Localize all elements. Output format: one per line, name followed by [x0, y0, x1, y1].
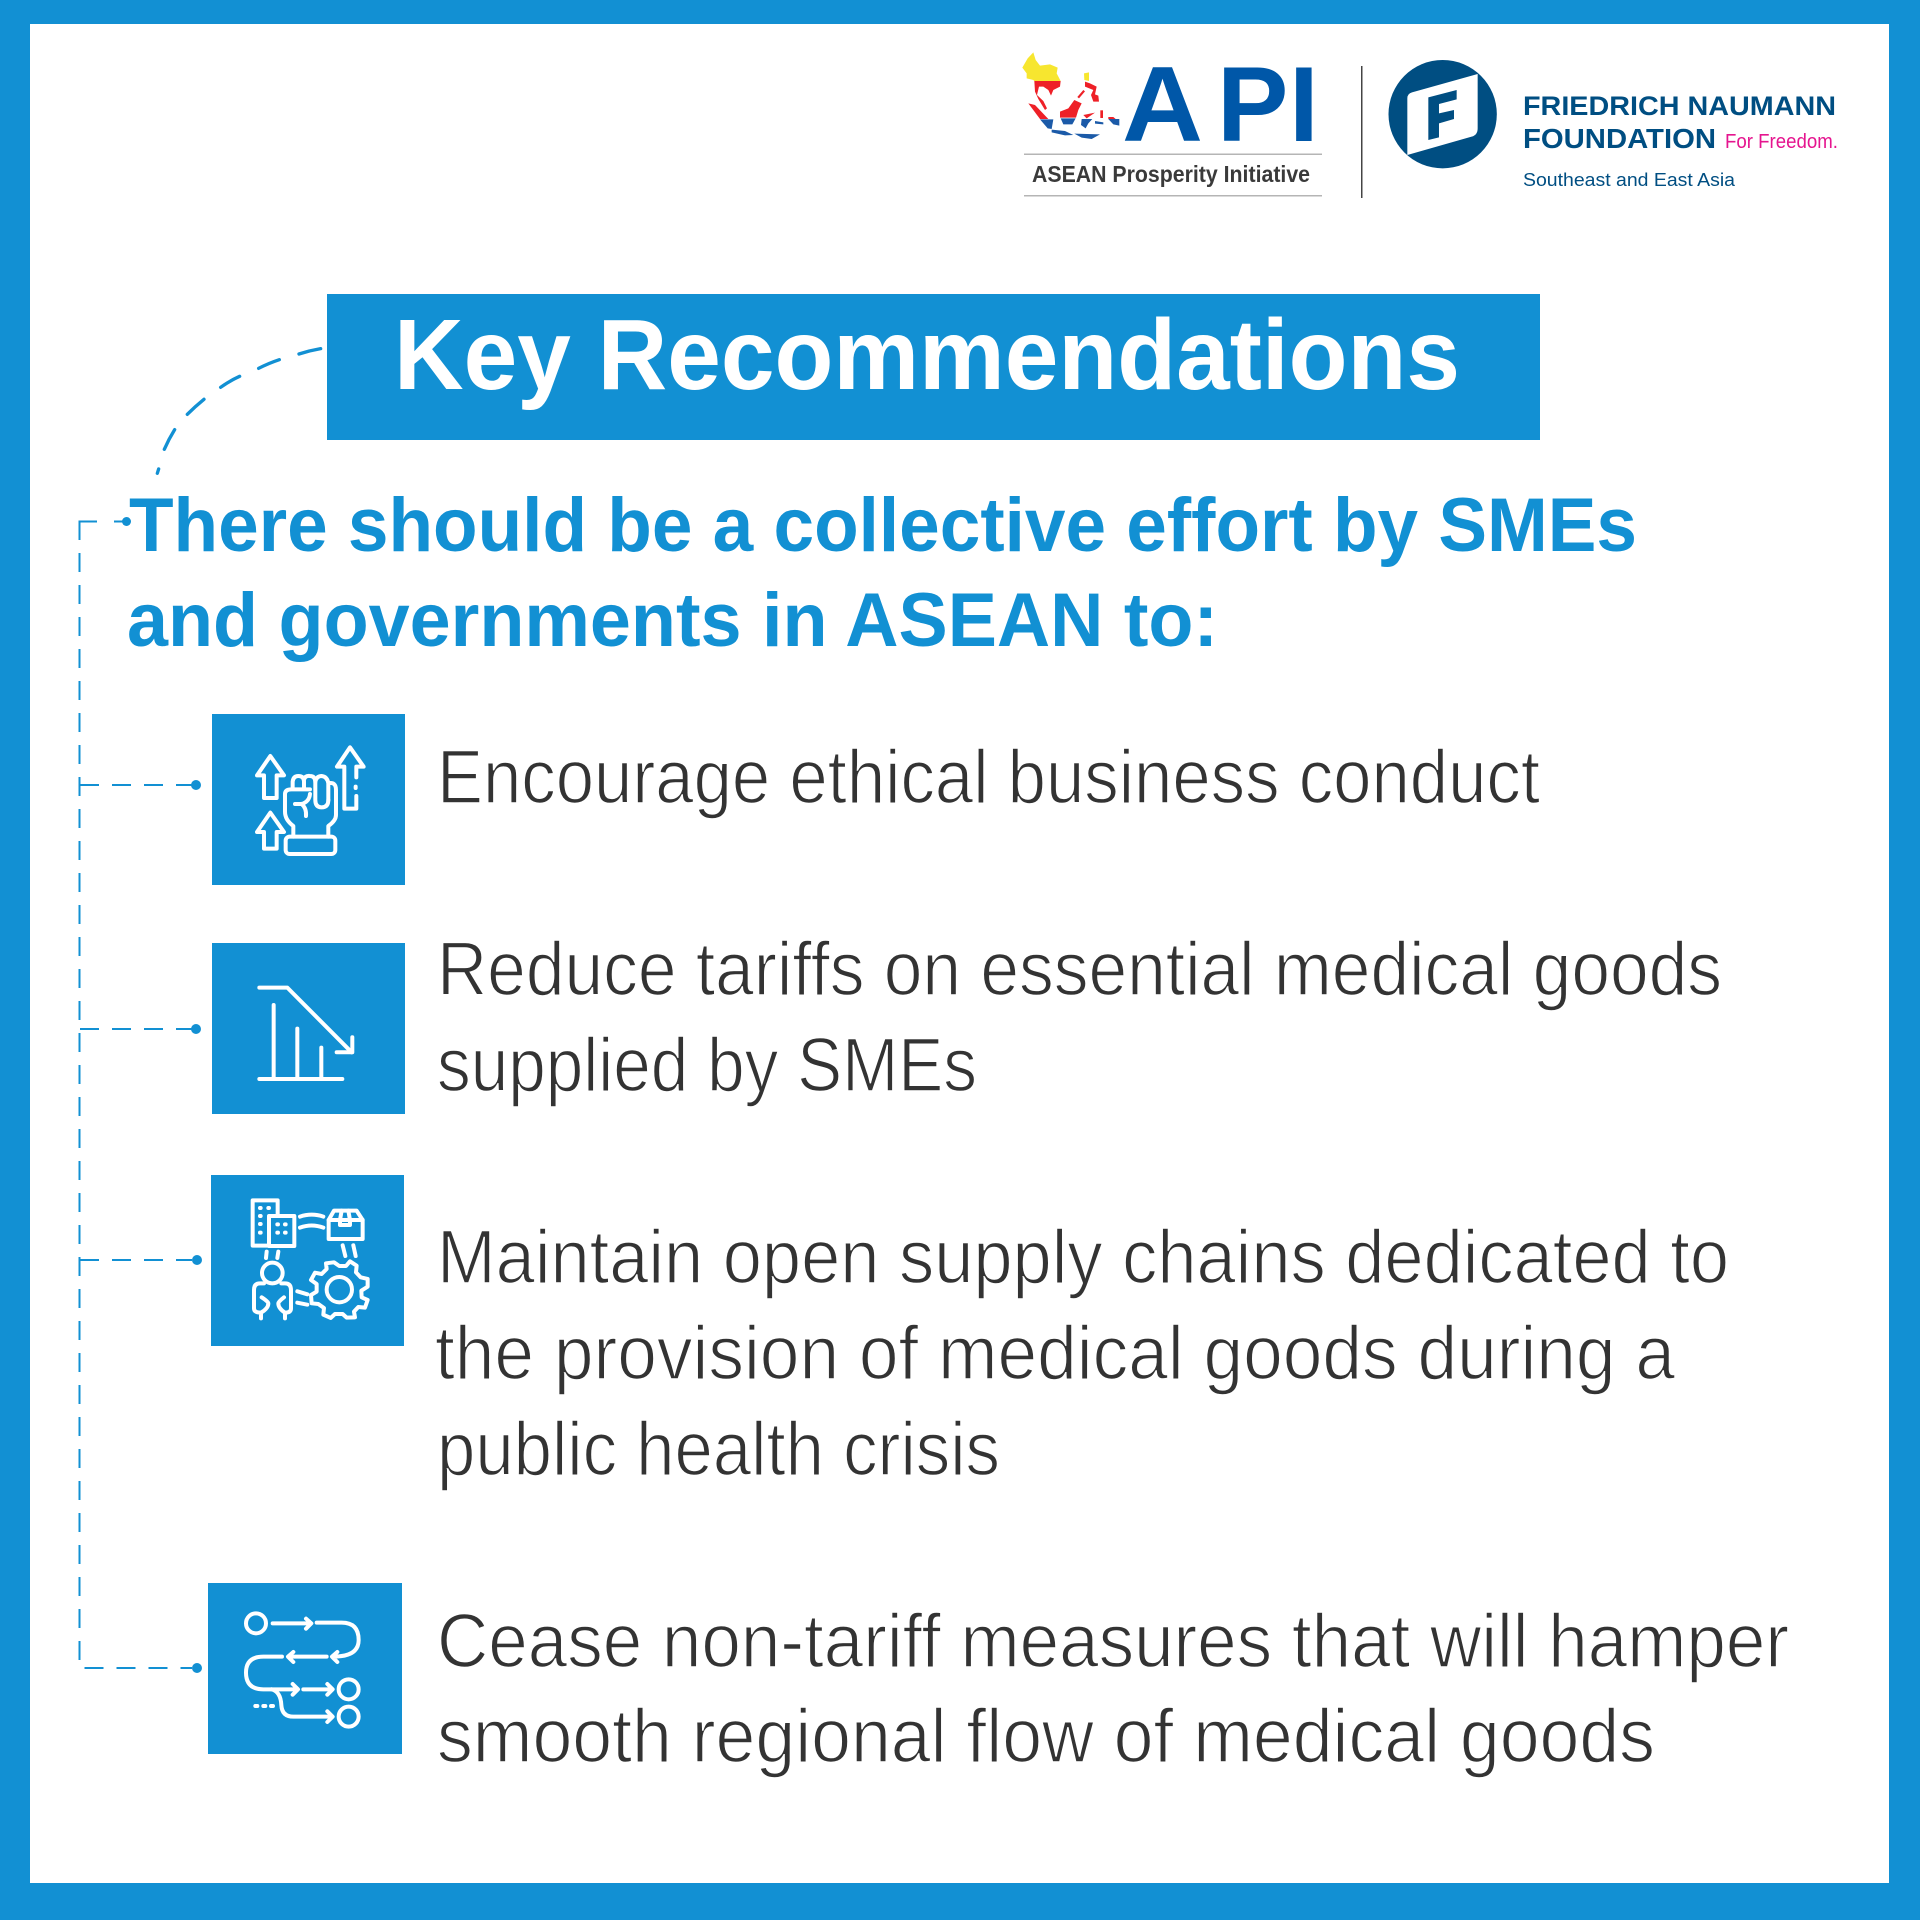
text: supply chains: Maintain open supply chains dedicated to	[437, 1215, 1729, 1300]
logo tagline: ASEAN Prosperity Initiative	[1032, 161, 1310, 187]
heading	[127, 483, 1637, 663]
icon panel: supply chain	[211, 1175, 404, 1346]
text: non-tariff measures: smooth regional flow of medical goods	[437, 1694, 1655, 1779]
icon panel: fist and arrows	[212, 714, 405, 885]
title banner: Key Recommendations	[394, 299, 1460, 411]
text: ethical conduct: Encourage ethical business conduct	[437, 735, 1540, 820]
heading: and governments in ASEAN to:	[127, 578, 1218, 663]
logo wordmark: API: I	[1289, 44, 1319, 164]
title banner	[327, 294, 1540, 440]
text: reduce tariffs: Reduce tariffs on essential medical goods	[437, 927, 1722, 1012]
logo wordmark: API: A	[1122, 44, 1203, 164]
text: supply chains	[435, 1215, 1729, 1492]
icon: ASEAN map	[1022, 52, 1119, 139]
logo wordmark: API	[1122, 44, 1319, 164]
text: reduce tariffs: supplied by SMEs	[437, 1023, 977, 1108]
curved dashed connector	[157, 349, 321, 473]
icon: FNF circle	[1388, 60, 1497, 168]
text: reduce tariffs	[437, 927, 1722, 1108]
text: non-tariff measures: Cease non-tariff measures that will hamper	[437, 1599, 1789, 1684]
icon panel: falling bar chart	[212, 943, 405, 1114]
logo: ASEAN Prosperity Initiative	[1022, 44, 1322, 196]
text: supply chains: the provision of medical goods during a	[435, 1311, 1676, 1396]
dashed tree connector	[80, 517, 202, 1673]
logo region: Southeast and East Asia	[1523, 169, 1736, 190]
logo: Friedrich Naumann Foundation	[1388, 60, 1838, 190]
heading: There should be a collective effort by SMEs	[129, 483, 1637, 568]
text: supply chains: public health crisis	[437, 1407, 1000, 1492]
text: non-tariff measures	[437, 1599, 1789, 1779]
logo wordmark: API: P	[1217, 44, 1288, 164]
logo name line 2: FOUNDATION	[1523, 123, 1716, 154]
logo name line 1: FRIEDRICH NAUMANN	[1523, 91, 1836, 121]
icon panel: process flow	[208, 1583, 402, 1754]
logo slogan: For Freedom.	[1725, 131, 1838, 153]
